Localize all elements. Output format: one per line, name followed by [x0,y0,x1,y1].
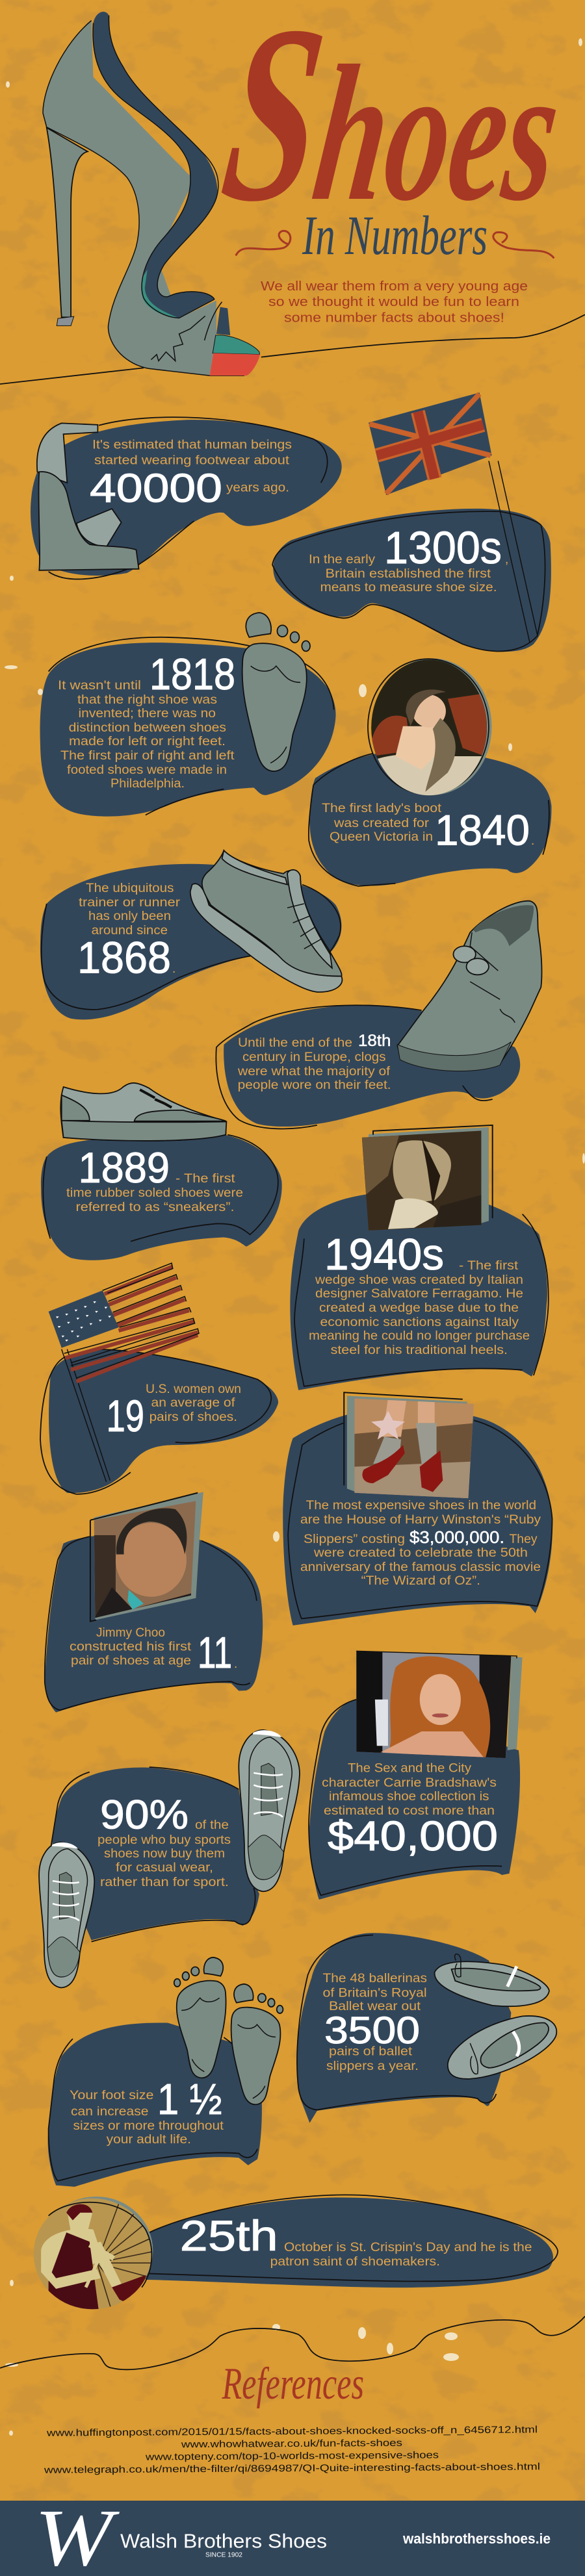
text [300,1499,541,1588]
photo: Jimmy Choo [90,1492,203,1623]
text: can increase [71,2105,148,2119]
text: pairs of ballet [329,2045,413,2059]
wavy divider top [0,314,585,384]
blob [309,754,551,886]
blob [45,1535,263,1713]
text: The ubiquitous [86,882,174,895]
photo: ruby slippers [344,1392,478,1499]
text: 1300s [384,522,502,573]
text: wedge shoe was created by Italian [315,1273,523,1287]
text: trainer or runner [79,896,181,910]
text: were what the majority of [237,1065,391,1078]
intro text: so we thought it would be fun to learn [268,295,519,309]
photo: Carrie Bradshaw [354,1650,523,1761]
text: patron saint of shoemakers. [270,2255,440,2269]
text: The first pair of right and left [60,749,235,763]
text [322,1972,427,2073]
text: “The Wizard of Oz”. [361,1574,480,1588]
intro text: some number facts about shoes! [284,311,504,325]
text: footed shoes were made in [67,763,227,777]
text: In the early [309,553,376,567]
text: Philadelphia. [110,777,185,791]
text: 1940s [324,1230,444,1279]
panel: 1868 [40,850,342,1019]
text: 25th [180,2212,278,2260]
icon: boot [37,423,139,570]
text: 1818 [150,650,235,699]
text [66,1143,243,1214]
text [70,2075,224,2147]
text: Britain established the first [325,567,491,581]
blob [309,1700,520,1900]
text: - The first [176,1172,235,1186]
panel: 25th October [32,2195,558,2312]
text: an average of [151,1396,235,1410]
blob [216,1005,520,1129]
text [98,1792,231,1889]
text: of the [195,1818,229,1832]
panel: 18th century clogs [216,901,541,1129]
text: character Carrie Bradshaw's [322,1776,497,1790]
text: estimated to cost more than [324,1804,495,1818]
text: Queen Victoria in [330,830,433,844]
text: . [234,1657,237,1671]
footer [0,2493,585,2576]
text [309,522,508,594]
blob [40,637,336,817]
text: meaning he could no longer purchase [309,1329,530,1343]
text: people wore on their feet. [238,1078,391,1092]
text: time rubber soled shoes were [66,1186,243,1200]
icon: shoemaker [32,2196,157,2312]
text: years ago. [226,481,289,495]
text: started wearing footwear about [94,453,290,468]
text: designer Salvatore Ferragamo. He [315,1287,523,1301]
text: around since [92,924,168,937]
icon: sneaker [60,1083,226,1141]
text [309,1230,530,1357]
text: . [531,834,534,848]
icon: ballet slipper bottom [448,2016,556,2079]
text: The 48 ballerinas [322,1972,427,1985]
text: sizes or more throughout [73,2119,224,2133]
blob [40,864,341,1019]
text: 90% [100,1792,188,1837]
blob [48,2022,262,2187]
since: SINCE 1902 [205,2551,242,2558]
text: 1840 [435,806,530,854]
text: that the right shoe was [77,693,217,707]
text [237,1032,391,1092]
panel: 1889 [41,1083,282,1260]
text: pair of shoes at age [71,1654,191,1668]
text [180,2212,532,2269]
text: It wasn't until [58,679,141,693]
text: means to measure shoe size. [320,581,497,594]
text: steel for his traditional heels. [331,1344,508,1357]
panel: foot size [48,1958,283,2187]
text [90,438,292,511]
text: 1868 [77,933,171,982]
blob [31,417,342,579]
text: are the House of Harry Winston's “Ruby [300,1513,541,1527]
text: They [510,1533,538,1546]
references list: www.whowhatwear.co.uk/fun-facts-shoes [181,2438,402,2450]
blob [290,1193,549,1390]
references list: www.telegraph.co.uk/men/the-filter/qi/8694987/QI-Quite-interesting-facts-about-shoes.html [44,2461,540,2476]
panel: 40000 years [31,417,342,579]
blob [272,509,551,652]
text: It's estimated that human beings [92,438,292,452]
icon: trainer [190,850,342,992]
icon: high-heel shoe [43,12,260,376]
text: Until the end of the [238,1036,352,1050]
text: The most expensive shoes in the world [306,1499,536,1512]
text: Ballet wear out [329,2000,421,2013]
panel: 90 percent [39,1730,300,1987]
text: 1 ½ [157,2075,222,2124]
text: slippers a year. [326,2060,419,2073]
icon: US flag [49,1263,199,1482]
text: 18th [358,1032,391,1050]
panel: 1300s [272,392,551,652]
text: economic sanctions against Italy [320,1316,519,1329]
references list: www.topteny.com/top-10-worlds-most-expensive-shoes [145,2449,439,2463]
icon: UK flag [369,392,538,643]
icon: pair of footprints [174,1958,283,2104]
blob [50,1767,259,1942]
website: walshbrothersshoes.ie [402,2531,551,2547]
text [107,1383,241,1441]
text: 11 [198,1628,232,1677]
text: century in Europe, clogs [242,1051,386,1064]
text: anniversary of the famous classic movie [300,1561,541,1574]
text: 1889 [78,1143,170,1192]
text: - The first [459,1259,519,1273]
text: Slippers” costing [304,1533,405,1546]
flourishes [236,231,554,258]
icon: clog boot [397,901,541,1071]
panel: Jimmy Choo [45,1492,263,1713]
text: constructed his first [70,1640,192,1654]
intro text [261,279,528,325]
panel: Carrie Bradshaw [309,1650,523,1900]
panel: 1840 [309,657,551,886]
blob [283,1412,552,1626]
text: 3500 [324,2009,420,2052]
subtitle: In Numbers [302,204,488,266]
left foot [174,1958,226,2078]
text: made for left or right feet. [69,735,226,748]
wavy divider bottom [0,2316,585,2369]
panel: 1940s wedge [290,1125,549,1390]
text: 40000 [90,466,222,511]
photo: Ferragamo [358,1125,493,1233]
text: Your foot size [70,2089,153,2102]
panel: 1818 [40,613,336,817]
text [322,1762,498,1859]
text: October is St. Crispin's Day and he is the [284,2241,532,2254]
text: shoes now buy them [104,1847,225,1861]
text: invented; there was no [78,707,216,721]
icon: sports shoe right [239,1730,300,1891]
references heading: References [222,2359,364,2409]
text [58,650,235,791]
text: The first lady's boot [322,802,442,815]
text [77,882,181,982]
text: U.S. women own [146,1383,241,1396]
references list [44,2424,540,2476]
text [70,1626,237,1677]
text: pairs of shoes. [150,1410,237,1424]
text [322,802,534,854]
panel: ballet slippers [297,1933,556,2123]
blob [40,1349,278,1494]
blob [297,1933,511,2123]
text: for casual wear, [116,1861,213,1875]
text: people who buy sports [98,1833,231,1847]
text: your adult life. [107,2133,191,2147]
text: 19 [107,1391,144,1441]
portrait: Queen Victoria [368,657,493,800]
text: Jimmy Choo [96,1626,165,1640]
blob [41,1135,282,1260]
references list: www.huffingtonpost.com/2015/01/15/facts-about-shoes-knocked-socks-off_n_6456712.html [46,2424,538,2439]
text: was created for [333,817,430,830]
text: The Sex and the City [348,1762,472,1775]
text: $40,000 [328,1813,498,1859]
brand name: Walsh Brothers Shoes [120,2530,327,2552]
panel: 19 pairs [40,1263,278,1494]
text: referred to as “sneakers”. [75,1201,234,1214]
icon: right footprint [242,613,310,771]
text: rather than for sport. [100,1876,229,1889]
text: has only been [88,910,171,923]
text: distinction between shoes [69,721,226,735]
text: . [172,962,176,976]
text: of Britain's Royal [322,1987,427,2000]
text: $3,000,000. [410,1527,504,1547]
panel: ruby slippers [283,1392,552,1626]
text: were created to celebrate the 50th [313,1546,528,1560]
text: created a wedge base due to the [319,1301,519,1315]
icon: ballet slipper top [435,1954,549,2006]
text: , [505,553,508,567]
right foot [231,1984,283,2104]
text: infamous shoe collection is [329,1790,489,1804]
icon: sports shoe left [39,1843,94,1987]
intro text: We all wear them from a very young age [261,279,528,294]
blob [146,2195,558,2288]
